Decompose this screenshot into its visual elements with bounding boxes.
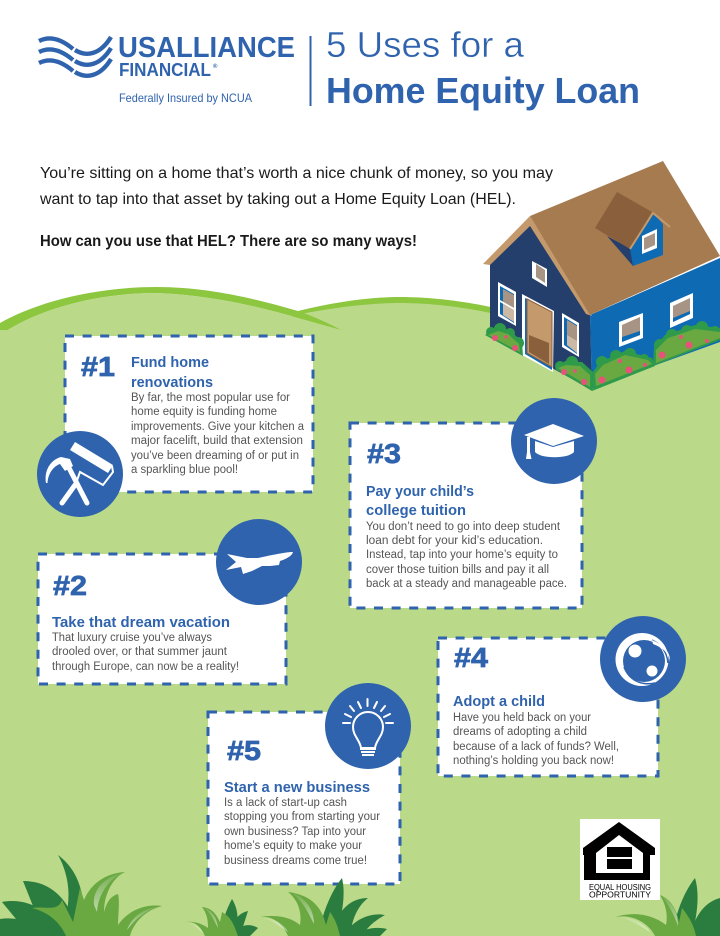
icon: two figures in a circle — [600, 616, 686, 702]
heading 3: Pay your child’s — [366, 484, 474, 500]
body 5: home’s equity to make your — [224, 840, 362, 852]
logo — [39, 32, 295, 105]
body 1: major facelift, build that extension — [131, 435, 303, 447]
box 2 frame — [38, 554, 286, 684]
logo subword: FINANCIAL — [119, 60, 211, 80]
panel: #3 college tuition — [350, 398, 597, 608]
body 1: you’ve been dreaming of or put in — [131, 450, 299, 462]
intro text: want to tap into that asset by taking out a Home Equity Loan (HEL). — [39, 191, 516, 208]
heading 3 — [366, 484, 474, 519]
body 3: back at a steady and manageable pace. — [366, 578, 567, 590]
title line one: 5 Uses for a — [326, 24, 525, 65]
body 5 — [224, 797, 380, 867]
body 5: stopping you from starting your — [224, 811, 380, 823]
equal housing text: EQUAL HOUSING — [589, 883, 651, 892]
body 1: home equity is funding home — [131, 406, 277, 418]
body 3 — [366, 521, 567, 590]
door — [522, 294, 554, 372]
flower bushes — [485, 321, 720, 391]
intro text: You’re sitting on a home that’s worth a nice chunk of money, so you may — [40, 165, 553, 182]
box 4 frame — [438, 638, 658, 776]
body 4 — [453, 712, 619, 767]
icon: roller and hammer — [37, 431, 123, 517]
box 1 frame — [65, 336, 313, 492]
body 4: Have you held back on your — [453, 712, 591, 724]
body 3: cover those tuition bills and pay it all — [366, 564, 549, 576]
panel: #1 fund home renovations — [37, 336, 313, 517]
title — [326, 24, 640, 111]
body 1 — [131, 392, 305, 476]
background hills — [0, 287, 720, 936]
icon: graduation cap — [511, 398, 597, 484]
body 2 — [52, 632, 239, 673]
panel: #2 dream vacation — [38, 519, 302, 684]
body 2: That luxury cruise you’ve always — [52, 632, 212, 644]
grass tuft right — [615, 878, 720, 936]
number 3: #3 — [367, 438, 401, 469]
body 3: You don’t need to go into deep student — [366, 521, 561, 533]
logo tagline: Federally Insured by NCUA — [119, 91, 252, 105]
left wall windows — [498, 261, 579, 357]
dormer — [595, 192, 670, 266]
roof — [530, 161, 720, 315]
heading 5: Start a new business — [224, 780, 370, 796]
right wall windows — [619, 293, 693, 347]
logo waves — [39, 37, 111, 76]
heading 3: college tuition — [366, 503, 466, 519]
body 4: dreams of adopting a child — [453, 726, 587, 738]
registered mark: ® — [213, 63, 218, 70]
heading 1: renovations — [131, 375, 213, 391]
equal housing text — [589, 883, 652, 900]
body 5: Is a lack of start-up cash — [224, 797, 347, 809]
grass tuft middle — [185, 899, 258, 936]
heading 1 — [131, 355, 213, 391]
equal housing opportunity logo — [580, 819, 660, 900]
body 5: own business? Tap into your — [224, 826, 366, 838]
equal housing text: OPPORTUNITY — [589, 890, 652, 900]
heading 4: Adopt a child — [453, 694, 545, 710]
body 4: nothing’s holding you back now! — [453, 755, 614, 767]
body 1: By far, the most popular use for — [131, 392, 290, 404]
title line two: Home Equity Loan — [326, 70, 640, 111]
body 2: drooled over, or that summer jaunt — [52, 646, 228, 658]
box 5 frame — [208, 712, 400, 884]
equal housing house icon — [583, 822, 655, 880]
box 3 frame — [350, 423, 582, 608]
number 2: #2 — [53, 570, 87, 601]
heading 1: Fund home — [131, 355, 209, 371]
gable trim — [483, 216, 592, 316]
panel: #4 adopt a child — [438, 616, 686, 776]
panel: #5 start a new business — [208, 683, 411, 884]
grass tuft left — [0, 855, 162, 936]
house illustration — [483, 161, 720, 391]
body 5: business dreams come true! — [224, 855, 367, 867]
body 3: Instead, tap into your home’s equity to — [366, 549, 558, 561]
icon: airplane — [216, 519, 302, 605]
logo wordmark: USALLIANCE — [118, 32, 295, 64]
body 2: through Europe, can now be a reality! — [52, 661, 239, 673]
house left wall — [490, 224, 592, 390]
heading 2: Take that dream vacation — [52, 615, 230, 631]
grass tuft centre — [260, 878, 387, 936]
icon: light bulb — [325, 683, 411, 769]
body 4: because of a lack of funds? Well, — [453, 741, 619, 753]
house right wall — [590, 258, 720, 388]
body 3: loan debt for your kid’s education. — [366, 535, 543, 547]
intro text — [39, 165, 553, 250]
number 1: #1 — [81, 351, 115, 382]
number 5: #5 — [227, 735, 261, 766]
intro text: How can you use that HEL? There are so many ways! — [40, 233, 417, 250]
number 4: #4 — [454, 642, 488, 673]
body 1: a sparkling blue pool! — [131, 464, 238, 476]
body 1: improvements. Give your kitchen a — [131, 421, 305, 433]
